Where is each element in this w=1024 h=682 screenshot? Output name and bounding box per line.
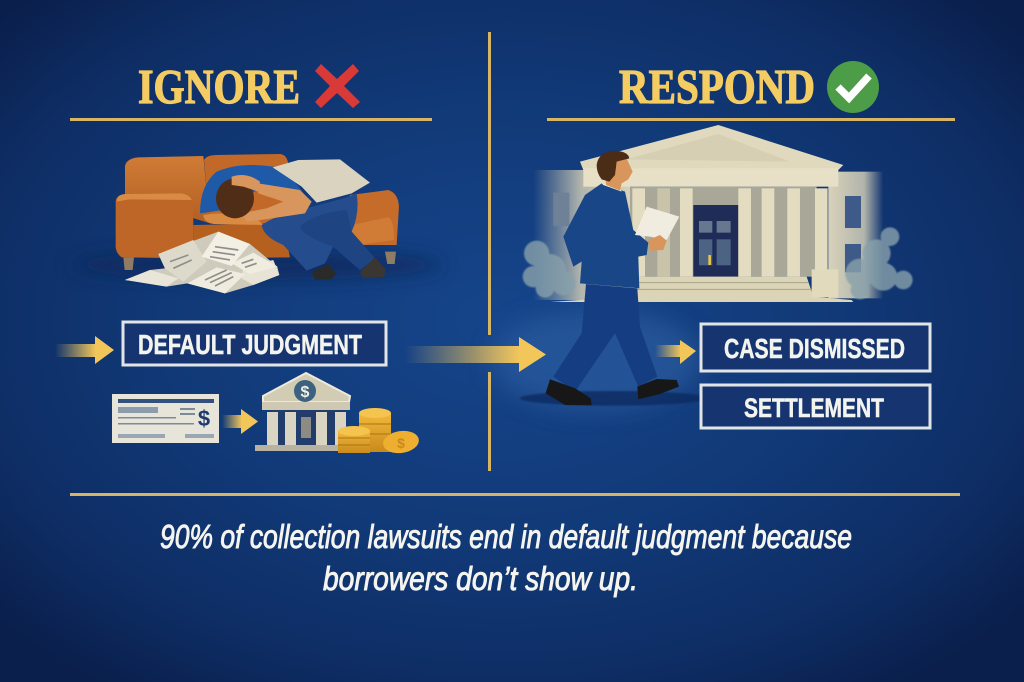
bottom statement: 90% of collection lawsuits end in default judgment because xyxy=(160,518,852,555)
box: case dismissed xyxy=(701,324,930,371)
heading: ignore: IGNORE xyxy=(138,59,300,114)
jacket xyxy=(563,183,648,288)
icon: bank: $ xyxy=(301,384,310,401)
couch xyxy=(116,154,399,270)
icon: check: $ xyxy=(198,406,210,431)
courthouse xyxy=(523,125,913,302)
lit ground xyxy=(492,310,702,410)
arrow into default judgment xyxy=(55,336,114,364)
bottom rule xyxy=(70,493,960,496)
head xyxy=(605,158,633,191)
bottom statement: borrowers don’t show up. xyxy=(323,560,638,597)
shoes xyxy=(546,379,592,405)
box: case dismissed: CASE DISMISSED xyxy=(724,333,905,364)
pillow xyxy=(273,159,370,203)
scene: man walking to courthouse xyxy=(520,125,913,406)
man slumped xyxy=(200,165,386,279)
icon: bank xyxy=(255,373,355,451)
paper xyxy=(635,207,679,240)
box: settlement xyxy=(701,385,930,428)
center divider xyxy=(488,32,491,471)
heading rule: respond xyxy=(547,118,955,121)
trousers xyxy=(553,284,657,392)
scattered papers xyxy=(125,232,279,293)
box: default judgment: DEFAULT JUDGMENT xyxy=(138,329,362,360)
icon: gold coins: $ xyxy=(397,435,405,451)
heading: respond: RESPOND xyxy=(619,59,815,114)
small arrow into case dismissed xyxy=(655,340,696,364)
main arrow: ignore to respond xyxy=(405,337,546,372)
box: default judgment xyxy=(123,322,386,365)
heading rule: ignore xyxy=(70,118,432,121)
icon: green check xyxy=(827,61,879,113)
small arrow: check to bank xyxy=(222,409,258,434)
bushes xyxy=(523,227,913,299)
walking man xyxy=(520,151,707,406)
icon: red x xyxy=(315,64,360,108)
bottom statement xyxy=(160,518,852,597)
box: settlement: SETTLEMENT xyxy=(744,393,884,423)
icon: gold coins xyxy=(338,408,420,455)
icon: check xyxy=(112,394,219,443)
scene: man slumped on couch xyxy=(70,154,443,293)
hand xyxy=(648,235,667,251)
